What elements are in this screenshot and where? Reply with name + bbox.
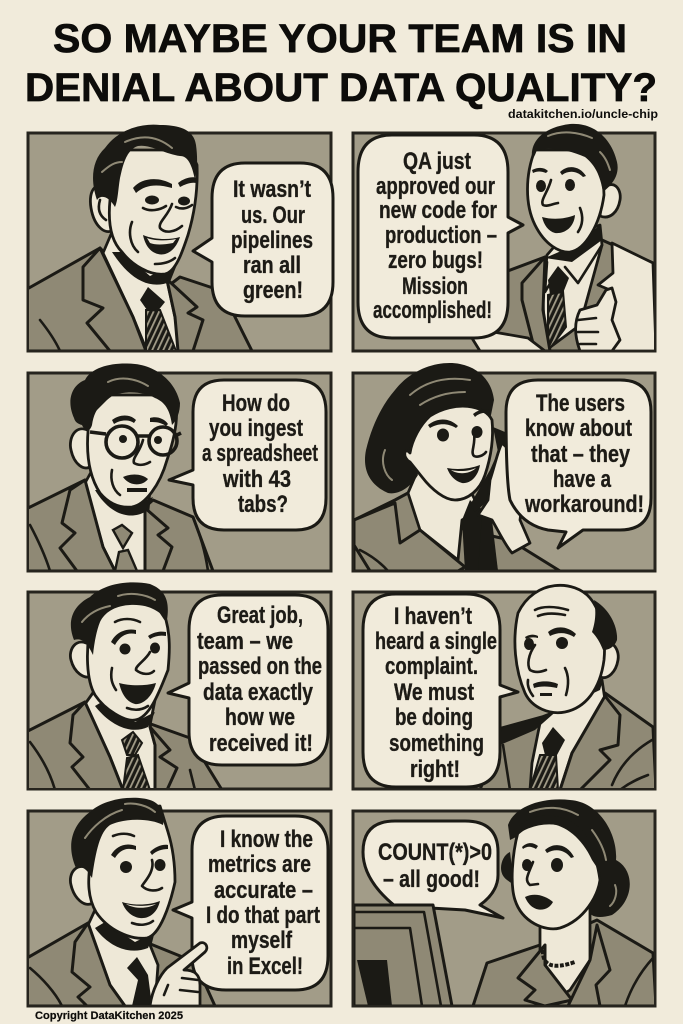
panel 8: COUNT check bbox=[353, 799, 656, 1006]
bubble text 7: myself bbox=[231, 927, 293, 954]
bubble text 7 bbox=[206, 826, 320, 980]
bubble text 2: QA just bbox=[403, 148, 471, 175]
figure: cheerful man bbox=[20, 582, 222, 790]
bubble text 6: complaint. bbox=[385, 653, 478, 680]
icon: computer monitor bbox=[354, 905, 452, 1006]
bubble text 5: Great job, bbox=[217, 602, 303, 629]
figure: woman with necklace bbox=[473, 799, 656, 1006]
bubble text 3: with 43 bbox=[222, 466, 291, 493]
bubble text 1: It wasn’t bbox=[233, 176, 311, 203]
bubble text 1: green! bbox=[243, 277, 303, 304]
bubble text 6: I haven’t bbox=[394, 603, 472, 630]
title: SO MAYBE YOUR TEAM IS IN bbox=[53, 17, 627, 61]
panel 5: passed on the data bbox=[20, 582, 331, 790]
title: DENIAL ABOUT DATA QUALITY? bbox=[25, 66, 657, 110]
bubble text 1: pipelines bbox=[231, 227, 313, 254]
bubble text 4: The users bbox=[536, 390, 625, 417]
bubble text 8 bbox=[378, 839, 492, 893]
bubble text 6: something bbox=[389, 730, 484, 757]
figure: man with thumbs up and clipboard bbox=[465, 124, 656, 351]
bubble text 3: How do bbox=[222, 390, 290, 417]
bubble text 8: COUNT(*)>0 bbox=[378, 839, 492, 866]
bubble text 5 bbox=[197, 602, 322, 757]
title bbox=[25, 17, 657, 110]
panel 4: users have a workaround bbox=[353, 363, 655, 571]
speech bubble 3 bbox=[169, 380, 326, 530]
bubble text 7: I know the bbox=[220, 826, 313, 853]
icon: pointing hand bbox=[150, 943, 207, 1006]
bubble text 6: right! bbox=[410, 756, 460, 783]
panel 6: no complaints bbox=[353, 585, 656, 790]
bubble text 2: new code for bbox=[379, 197, 497, 224]
bubble text 2: zero bugs! bbox=[388, 247, 483, 274]
bubble text 6: be doing bbox=[395, 704, 473, 731]
speech bubble 4 bbox=[506, 380, 651, 548]
bubble text 4: that – they bbox=[531, 441, 631, 468]
figure: man pointing bbox=[20, 798, 215, 1006]
figure: smiling man bbox=[20, 125, 252, 351]
bubble text 7: I do that part bbox=[206, 902, 320, 929]
bubble text 4: workaround! bbox=[524, 491, 644, 518]
bubble text 1 bbox=[231, 176, 313, 304]
bubble text 4 bbox=[524, 390, 644, 518]
copyright footer: Copyright DataKitchen 2025 bbox=[35, 1010, 183, 1022]
figure: balding older man bbox=[480, 585, 656, 790]
panel 7: metrics in Excel bbox=[20, 798, 331, 1006]
speech bubble 7 bbox=[173, 816, 328, 990]
bubble text 3: you ingest bbox=[209, 415, 303, 442]
bubble text 1: ran all bbox=[243, 252, 301, 279]
bubble text 2: accomplished! bbox=[373, 297, 492, 324]
bubble text 6: We must bbox=[394, 679, 474, 706]
bubble text 6 bbox=[375, 603, 497, 783]
bubble text 5: team – we bbox=[197, 628, 293, 655]
bubble text 7: accurate – bbox=[214, 877, 313, 904]
bubble text 5: data exactly bbox=[203, 679, 314, 706]
speech bubble 6 bbox=[363, 594, 518, 787]
bubble text 3 bbox=[202, 390, 318, 518]
bubble text 6: heard a single bbox=[375, 628, 497, 655]
bubble text 5: how we bbox=[225, 704, 295, 731]
bubble text 2 bbox=[373, 148, 497, 324]
bubble text 2: approved our bbox=[376, 173, 495, 200]
bubble text 3: tabs? bbox=[238, 491, 288, 518]
speech bubble 5 bbox=[168, 595, 328, 765]
bubble text 5: passed on the bbox=[198, 653, 322, 680]
source url: datakitchen.io/uncle-chip bbox=[508, 109, 658, 121]
speech bubble 1 bbox=[193, 163, 333, 316]
bubble text 7: metrics are bbox=[208, 851, 311, 878]
figure: worried man with glasses bbox=[20, 364, 213, 571]
bubble text 3: a spreadsheet bbox=[202, 440, 318, 467]
speech bubble 2 bbox=[358, 135, 523, 338]
panel 1: pipelines ran green bbox=[20, 125, 333, 351]
bubble text 4: know about bbox=[525, 415, 632, 442]
bubble text 4: have a bbox=[553, 466, 612, 493]
bubble text 5: received it! bbox=[209, 730, 313, 757]
bubble text 2: production – bbox=[385, 222, 497, 249]
figure: woman on the phone bbox=[354, 363, 560, 571]
bubble text 2: Mission bbox=[402, 273, 468, 300]
bubble text 7: in Excel! bbox=[227, 953, 303, 980]
speech bubble 8 bbox=[363, 821, 503, 918]
panel 2: QA approved bbox=[353, 124, 656, 351]
panel 3: spreadsheet with 43 tabs bbox=[20, 364, 331, 571]
bubble text 1: us. Our bbox=[241, 202, 305, 229]
bubble text 8: – all good! bbox=[383, 866, 480, 893]
